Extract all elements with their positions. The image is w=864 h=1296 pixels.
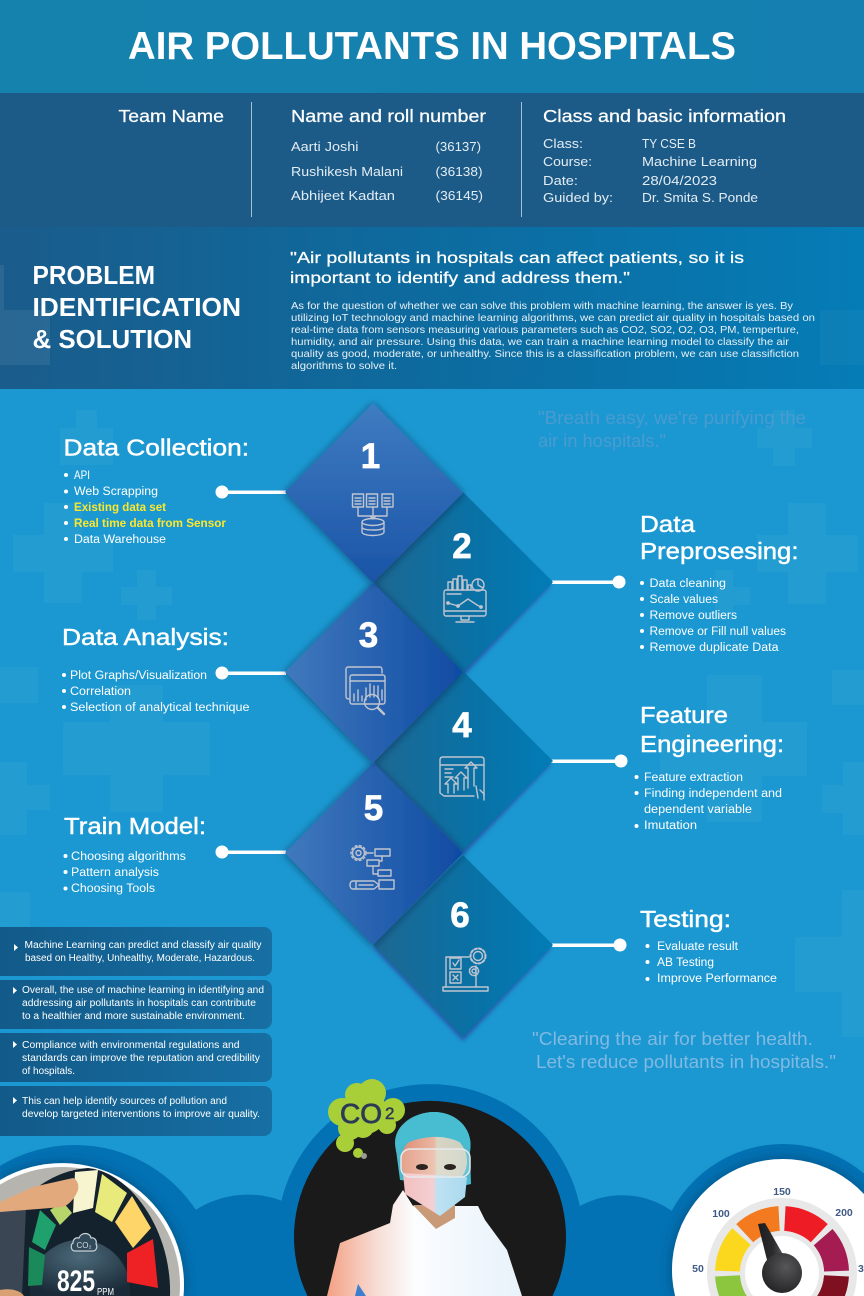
numbers: 3	[359, 616, 378, 655]
image: CO2 meter with finger	[0, 1163, 184, 1296]
gauge hub	[762, 1253, 802, 1293]
section: feature engineering	[634, 702, 784, 832]
heading: team name: Team Name	[118, 106, 224, 126]
quote: breath easy: "Breath easy, we're purifying the	[538, 408, 806, 428]
text block: solution paragraph	[291, 301, 815, 372]
section: testing: Improve Performance	[657, 973, 777, 985]
takeaway 2: to a healthier and more sustainable environment.	[22, 1011, 245, 1022]
quote: clearing the air	[532, 1029, 836, 1072]
block: names and roll numbers: Rushikesh Malani	[291, 164, 403, 179]
takeaway 1: based on Healthy, Unhealthy, Moderate, Hazardous.	[25, 953, 255, 964]
cap front	[396, 1112, 471, 1152]
quote: problem statement: "Air pollutants in hospitals can affect patients, so it is	[290, 250, 744, 267]
text block: solution paragraph: quality as good, moderate, or unhealthy. Since this is a classification problem, we can use classifiction	[291, 349, 799, 360]
takeaway 2: addressing air pollutants in hospitals can contribute	[22, 998, 257, 1009]
takeaway 4: This can help identify sources of pollution and	[22, 1096, 227, 1107]
block: names and roll numbers: Name and roll number	[291, 106, 486, 126]
title: AIR POLLUTANTS IN HOSPITALS	[128, 25, 736, 68]
block: names and roll numbers: Aarti Joshi	[291, 139, 359, 154]
section: train model: Choosing algorithms	[71, 851, 186, 863]
takeaway 3: of hospitals.	[22, 1066, 75, 1077]
block: class and basic information: Course:	[543, 154, 592, 169]
takeaway 1: Machine Learning can predict and classify air quality	[24, 940, 262, 951]
icon: chart with rising arrows	[440, 757, 484, 800]
section: data collection: API	[74, 470, 90, 482]
section: data collection: Data Warehouse	[74, 534, 166, 546]
gauge: air quality dial	[672, 1159, 864, 1296]
takeaway 4: develop targeted interventions to improve air quality.	[22, 1109, 260, 1120]
mask	[403, 1173, 467, 1216]
icon: monitor with charts	[444, 576, 486, 622]
gauge labels	[692, 1186, 864, 1275]
gauge labels: 150	[773, 1186, 791, 1198]
section: data preprocessing: Scale values	[650, 594, 718, 606]
takeaway 3	[0, 1033, 272, 1082]
neck	[413, 1205, 455, 1229]
CO2 thought bubble: 2	[385, 1104, 394, 1123]
section: train model: Pattern analysis	[71, 867, 159, 879]
section: data collection: Real time data from Sensor	[74, 518, 227, 530]
diamond shadows	[373, 498, 551, 1041]
takeaway 4	[0, 1086, 272, 1136]
heading: problem identification	[32, 262, 241, 354]
takeaway 3: standards can improve the reputation and credibility	[22, 1053, 260, 1064]
section: feature engineering: Finding independent and	[644, 788, 782, 800]
text block: solution paragraph: As for the question of whether we can solve this problem with machine learning, the answer is yes. By	[291, 301, 794, 312]
takeaway 1	[0, 927, 272, 976]
diamond 2	[373, 492, 553, 672]
section: data preprocessing: Data	[640, 511, 695, 537]
diamond 3	[285, 583, 463, 763]
numbers: 2	[452, 527, 472, 566]
numbers: 4	[452, 706, 472, 745]
block: class and basic information: Guided by:	[543, 190, 613, 205]
gauge labels: 50	[692, 1263, 704, 1275]
face	[401, 1131, 467, 1191]
quote: problem statement	[290, 250, 744, 287]
section: feature engineering: Feature extraction	[644, 772, 743, 784]
section: data analysis: Correlation	[70, 686, 131, 698]
goggles	[401, 1149, 470, 1177]
section: data preprocessing: Remove outliers	[650, 610, 737, 622]
text block: solution paragraph: utilizing IoT technology and machine learning algorithms, we can predict air quality in hospitals based on	[291, 313, 815, 324]
CO2 thought bubble	[328, 1079, 405, 1159]
icon: laptop with checklist and gears	[443, 948, 488, 991]
numbers: 5	[364, 789, 383, 828]
block: class and basic information: TY CSE B	[642, 136, 696, 151]
section: data preprocessing: Remove duplicate Data	[650, 642, 779, 654]
gauge needle	[758, 1223, 785, 1260]
quote: clearing the air: "Clearing the air for better health.	[532, 1029, 813, 1049]
block: class and basic information: Class:	[543, 136, 583, 151]
icon: CO2 cloud	[71, 1234, 97, 1251]
finger	[0, 1178, 78, 1212]
takeaway 2	[0, 980, 272, 1029]
section: data collection: Existing data set	[74, 502, 166, 514]
eyes	[416, 1164, 456, 1170]
text block: solution paragraph: humidity, and air pressure. Using this data, we can train a machine learning model to classify the air	[291, 337, 790, 348]
block: names and roll numbers: (36145)	[436, 188, 483, 203]
diamond 4	[373, 671, 553, 851]
block: names and roll numbers	[291, 106, 486, 203]
text block: solution paragraph: algorithms to solve it.	[291, 361, 397, 372]
section: feature engineering: Engineering:	[640, 731, 784, 757]
quote: breath easy	[538, 408, 806, 451]
panel: team information	[0, 93, 864, 227]
CO2 thought bubble: CO	[340, 1098, 382, 1129]
icon: data sources to database	[352, 494, 393, 536]
block: class and basic information: Dr. Smita S. Ponde	[642, 190, 758, 205]
block: class and basic information: Class and basic information	[543, 106, 786, 126]
block: class and basic information	[543, 106, 786, 205]
suit	[327, 1190, 522, 1296]
numbers: 6	[450, 896, 470, 935]
section: train model	[64, 813, 206, 895]
section: data collection: Web Scrapping	[74, 486, 158, 498]
heading: problem identification: IDENTIFICATION	[32, 294, 241, 322]
section: data preprocessing: Remove or Fill null values	[650, 626, 786, 638]
block: class and basic information: Date:	[543, 173, 578, 188]
section: feature engineering: Imutation	[644, 820, 697, 832]
block: names and roll numbers: (36137)	[436, 139, 481, 154]
section: testing: AB Testing	[657, 957, 714, 969]
section: data preprocessing	[640, 511, 798, 654]
section: data preprocessing: Preprosesing:	[640, 538, 798, 564]
numbers	[359, 437, 472, 935]
connectors	[216, 486, 628, 952]
takeaway 2: Overall, the use of machine learning in identifying and	[22, 985, 264, 996]
quote: clearing the air: Let's reduce pollutants in hospitals."	[536, 1052, 836, 1072]
quote: problem statement: important to identify and address them."	[290, 270, 630, 287]
block: names and roll numbers: (36138)	[436, 164, 482, 179]
section: testing: Testing:	[640, 906, 731, 932]
section: data analysis: Selection of analytical technique	[70, 702, 250, 714]
section: data analysis	[62, 624, 250, 714]
section: train model: Choosing Tools	[71, 883, 155, 895]
section: feature engineering: dependent variable	[644, 804, 752, 816]
section: feature engineering: Feature	[640, 702, 728, 728]
title band	[0, 0, 864, 93]
section: data collection: Data Collection:	[64, 434, 249, 460]
numbers: 1	[361, 437, 380, 476]
gauge segments	[715, 1219, 849, 1296]
block: class and basic information: Machine Learning	[642, 154, 757, 169]
gauge labels: 100	[712, 1208, 730, 1220]
background cross pattern	[0, 410, 864, 1037]
icon: analysis window with magnifier	[346, 667, 385, 714]
block: names and roll numbers: Abhijeet Kadtan	[291, 188, 395, 203]
diamond 1	[285, 403, 463, 583]
heading: problem identification: PROBLEM	[32, 262, 155, 290]
panel: problem identification and solution	[0, 227, 864, 389]
section: data analysis: Data Analysis:	[62, 624, 229, 650]
image: medical worker in mask	[294, 1101, 566, 1296]
quote: breath easy: air in hospitals."	[538, 431, 666, 451]
heading: problem identification: & SOLUTION	[32, 326, 192, 354]
meter segments	[28, 1170, 158, 1288]
section: train model: Train Model:	[64, 813, 206, 839]
section: testing	[640, 906, 777, 985]
section: data collection	[64, 434, 249, 546]
gauge labels: 3	[858, 1263, 864, 1275]
section: data analysis: Plot Graphs/Visualization	[70, 670, 207, 682]
gauge labels: 200	[835, 1207, 853, 1219]
panel: key takeaways	[0, 927, 272, 1136]
cap back	[395, 1112, 471, 1186]
diamond 6	[373, 855, 553, 1037]
icon: CO2 cloud: CO₂	[76, 1241, 92, 1250]
diamond 5	[285, 763, 463, 945]
section: data preprocessing: Data cleaning	[650, 578, 726, 590]
bottom cloud shape	[0, 1084, 864, 1296]
section: testing: Evaluate result	[657, 941, 739, 953]
text block: solution paragraph: real-time data from sensors measuring various parameters such as CO2, SO2, O2, O3, PM, temperture,	[291, 325, 799, 336]
gloves	[355, 1284, 366, 1296]
block: class and basic information: 28/04/2023	[642, 173, 717, 188]
icon: workflow with gear and pencil	[350, 846, 394, 889]
diamond flow diagram	[216, 403, 628, 1041]
sleeve	[0, 1208, 26, 1296]
takeaway 3: Compliance with environmental regulations and	[22, 1040, 239, 1051]
